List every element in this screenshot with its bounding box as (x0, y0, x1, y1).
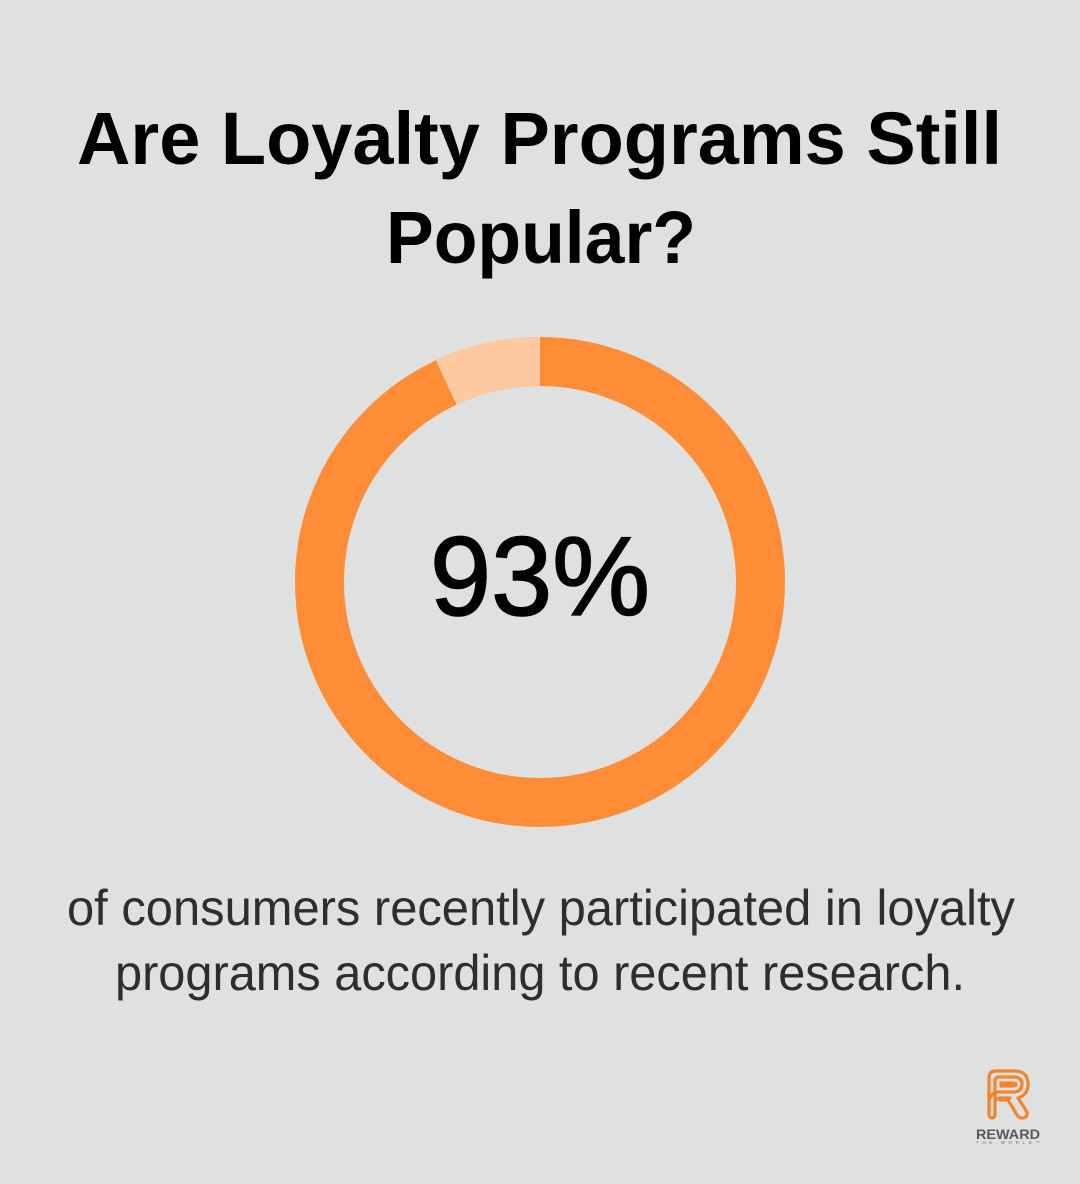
wordmark: REWARD (976, 1126, 1040, 1142)
logo: Reward the World (976, 1071, 1040, 1145)
title: Are Loyalty Programs Still (77, 97, 1002, 180)
title: Popular? (386, 196, 696, 279)
description text (67, 880, 1015, 1001)
donut chart: 93% (320, 337, 760, 802)
description text: of consumers recently participated in loyalty (67, 880, 1015, 936)
tagline: THE WORLD™ (976, 1140, 1040, 1145)
value: 93%: 93% (430, 514, 650, 639)
title (77, 97, 1002, 279)
description text: programs according to recent research. (115, 945, 965, 1001)
icon: R mark (989, 1071, 1028, 1118)
